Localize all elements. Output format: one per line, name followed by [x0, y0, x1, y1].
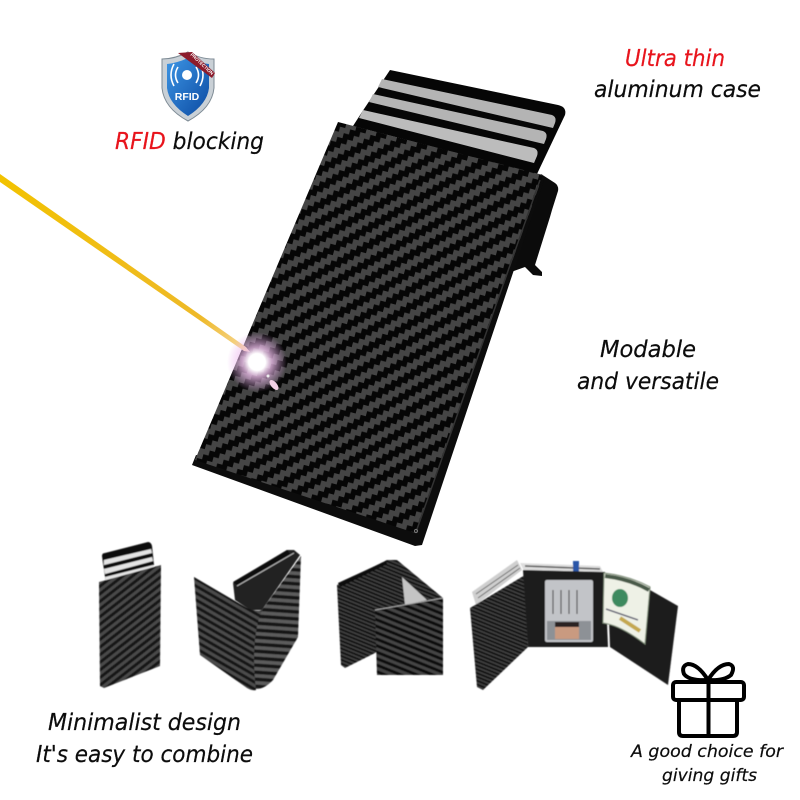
heading: ultra thin aluminum case: aluminum case — [594, 77, 761, 103]
heading: ultra thin aluminum case — [594, 46, 761, 103]
icon: RFID shield: PROTECTION — [189, 52, 214, 76]
caption: gift choice: A good choice for — [630, 742, 784, 762]
heading: minimalist design — [36, 710, 253, 768]
caption: gift choice — [630, 742, 784, 786]
small wallet 1: closed with cards — [99, 542, 161, 688]
heading: modable and versatile: Modable — [600, 337, 696, 363]
heading: minimalist design: It's easy to combine — [36, 742, 253, 768]
main wallet — [192, 70, 565, 546]
heading: RFID blocking: RFID blocking — [115, 129, 264, 155]
small wallet 3: tri-fold standing — [337, 560, 443, 675]
carbon fibre face — [195, 122, 543, 533]
light flare — [227, 332, 287, 392]
caption: gift choice: giving gifts — [662, 766, 757, 786]
icon: RFID shield — [162, 52, 215, 121]
small wallet 4: open with ID and banknote — [470, 560, 678, 690]
icon: RFID shield: RFID — [175, 91, 200, 103]
heading: ultra thin aluminum case: Ultra thin — [625, 46, 725, 72]
rivet — [414, 529, 418, 533]
banknote — [603, 573, 650, 644]
heading: minimalist design: Minimalist design — [48, 710, 241, 736]
small wallet 2: half open — [194, 550, 301, 690]
card stack — [353, 70, 565, 174]
left panel — [470, 575, 528, 690]
ID card — [545, 580, 593, 642]
heading: modable and versatile — [577, 337, 719, 395]
wallet edge — [192, 177, 545, 546]
cards — [472, 560, 522, 605]
side clip — [511, 174, 558, 276]
centre panel — [523, 570, 608, 647]
laser beam — [0, 174, 250, 352]
edge highlight — [416, 180, 540, 532]
right panel — [609, 590, 678, 685]
icon: gift box — [673, 664, 744, 736]
heading: modable and versatile: and versatile — [577, 369, 719, 395]
